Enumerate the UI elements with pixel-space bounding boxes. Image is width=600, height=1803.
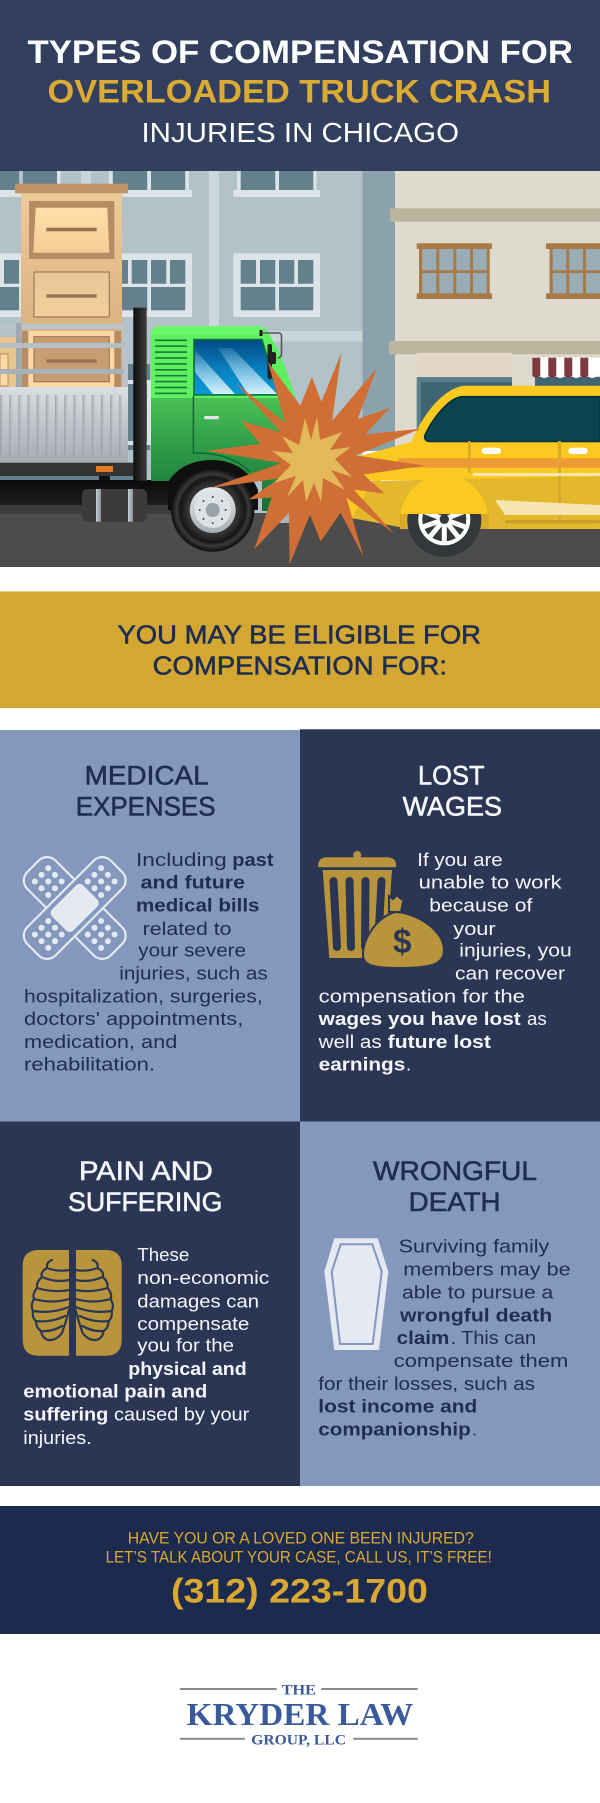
body text: medical expenses: medication, and — [24, 1031, 177, 1052]
panel: pain and suffering — [0, 1122, 300, 1486]
body text: lost wages: because of — [429, 895, 533, 916]
front truck wheel — [168, 460, 258, 552]
left grey building — [0, 171, 362, 516]
orange body stripe — [398, 458, 600, 468]
third row window behind truck — [128, 364, 150, 450]
small box at left — [0, 337, 16, 388]
body text: medical expenses: hospitalization, surgeries, — [24, 986, 263, 1007]
heading: wrongful death: WRONGFUL — [373, 1156, 537, 1186]
body text: lost wages: well as — [318, 1031, 382, 1052]
body text: medical expenses: medical bills — [136, 895, 260, 916]
body text: wrongful death: lost income and — [318, 1396, 477, 1417]
body text: pain and suffering: you for the — [137, 1335, 234, 1356]
body text: pain and suffering: emotional pain and — [23, 1381, 207, 1402]
logo: The Kryder Law Group, LLC: KRYDER LAW — [187, 1696, 413, 1732]
explosion burst — [207, 353, 425, 564]
brown window A — [417, 243, 492, 299]
icon: crossed bandages — [19, 852, 131, 964]
body text: pain and suffering: These — [137, 1244, 189, 1265]
body text: wrongful death: Surviving family — [399, 1236, 550, 1257]
road — [0, 513, 600, 567]
drawer 2 — [34, 272, 109, 317]
shop sign and storefront — [416, 352, 512, 430]
heading: medical expenses: EXPENSES — [76, 792, 216, 822]
banner: eligibility heading — [0, 591, 600, 708]
top row windows — [0, 190, 192, 197]
orange marker light — [96, 466, 113, 472]
body text: pain and suffering: damages can — [137, 1290, 259, 1311]
car wheel — [400, 475, 489, 557]
body text: lost wages — [318, 849, 572, 1075]
body text: medical expenses — [24, 849, 274, 1075]
body text: medical expenses: past — [232, 849, 274, 870]
body text: wrongful death: claim — [397, 1327, 449, 1348]
heading: lost wages: WAGES — [403, 792, 502, 822]
body text: wrongful death: . This can — [451, 1327, 536, 1348]
body text: medical expenses: related to — [143, 918, 232, 939]
yellow car — [340, 386, 600, 557]
body text: wrongful death: members may be — [403, 1259, 571, 1280]
body text: pain and suffering — [23, 1244, 269, 1448]
banner: eligibility heading: YOU MAY BE ELIGIBLE FOR — [118, 622, 481, 650]
call to action text: HAVE YOU OR A LOVED ONE BEEN INJURED? — [128, 1529, 474, 1547]
logo: The Kryder Law Group, LLC — [180, 1682, 418, 1748]
right beige building — [389, 171, 600, 451]
body text: medical expenses: Including — [136, 849, 227, 870]
logo: The Kryder Law Group, LLC: THE — [282, 1682, 316, 1698]
phone number: (312) 223-1700 — [171, 1573, 428, 1611]
drawer 3 — [22, 331, 121, 388]
second row left window — [0, 253, 192, 317]
header panel — [0, 0, 600, 171]
body text: lost wages: as — [527, 1008, 547, 1029]
body text: medical expenses: injuries, such as — [119, 962, 268, 983]
body text: pain and suffering: injuries. — [23, 1427, 92, 1448]
body text: lost wages: earnings — [319, 1054, 405, 1075]
title line 3: INJURIES IN CHICAGO — [142, 117, 459, 148]
panel: lost wages — [300, 729, 600, 1122]
body text: lost wages: injuries, you — [459, 940, 572, 961]
heading: lost wages — [403, 761, 502, 822]
body text: wrongful death: able to pursue a — [402, 1282, 554, 1303]
body text: pain and suffering: compensate — [137, 1313, 249, 1334]
icon: rib cage — [23, 1250, 122, 1356]
corrugated truck bed — [0, 387, 128, 463]
body text: lost wages: If you are — [417, 849, 503, 870]
door handles — [482, 448, 501, 454]
chassis — [0, 480, 182, 505]
brown window B — [546, 243, 600, 299]
drawer 1 — [29, 201, 114, 259]
dollar sign: $ — [393, 923, 412, 961]
door seams — [468, 441, 471, 473]
side mirror — [260, 330, 282, 379]
green cab — [151, 326, 300, 523]
illustration: truck crashing into car on a city street — [0, 171, 600, 567]
shadow column — [362, 171, 395, 451]
logo: The Kryder Law Group, LLC: GROUP, LLC — [251, 1732, 346, 1748]
heading: pain and suffering: SUFFERING — [68, 1187, 222, 1217]
light strip — [473, 473, 600, 476]
body text: wrongful death: compensate them — [394, 1350, 568, 1371]
body text: lost wages: future lost — [388, 1031, 491, 1052]
panel: wrongful death — [300, 1122, 600, 1486]
body text: lost wages: compensation for the — [319, 986, 525, 1007]
heading: lost wages: LOST — [418, 761, 484, 791]
body text: lost wages: wages you have lost — [318, 1008, 521, 1029]
stacked cabinet cargo — [0, 184, 128, 388]
exhaust stack — [133, 308, 147, 481]
lower reflection — [495, 500, 600, 515]
body text: wrongful death: . — [472, 1419, 477, 1440]
body text: wrongful death: for their losses, such as — [318, 1373, 535, 1394]
door handle — [204, 416, 219, 419]
body text: wrongful death: wrongful death — [399, 1305, 552, 1326]
heading: wrongful death: DEATH — [409, 1187, 501, 1217]
body text: medical expenses: doctors' appointments, — [24, 1008, 243, 1029]
striped awning — [532, 358, 600, 386]
panel: medical expenses — [0, 730, 300, 1122]
body text: pain and suffering: suffering — [23, 1404, 108, 1425]
body text: lost wages: can recover — [455, 962, 565, 983]
body text: medical expenses: rehabilitation. — [24, 1054, 155, 1075]
heading: wrongful death — [373, 1156, 537, 1217]
body text: lost wages: your — [453, 918, 496, 939]
body text: wrongful death: companionship — [318, 1419, 471, 1440]
truck — [0, 308, 300, 552]
body text: pain and suffering: physical and — [128, 1358, 247, 1379]
heading: medical expenses: MEDICAL — [85, 761, 209, 791]
fuel tank — [82, 489, 147, 522]
heading: medical expenses — [76, 761, 216, 822]
call to action panel: LET’S TALK ABOUT YOUR CASE, CALL US, IT’S FREE! — [106, 1548, 492, 1566]
title line 1: TYPES OF COMPENSATION FOR — [28, 34, 573, 70]
body text: lost wages: . — [406, 1054, 411, 1075]
call to action panel — [0, 1506, 600, 1634]
bed rails — [0, 323, 125, 388]
body text: lost wages: unable to work — [419, 872, 563, 893]
second row right window — [233, 253, 320, 317]
heading: pain and suffering: PAIN AND — [79, 1156, 213, 1186]
door outline — [193, 396, 250, 472]
icon: trash can with money bag — [318, 851, 444, 968]
body text: medical expenses: and future — [141, 872, 245, 893]
body text: medical expenses: your severe — [138, 940, 246, 961]
car window — [425, 397, 600, 442]
body text: pain and suffering: caused by your — [114, 1404, 249, 1425]
body text: wrongful death — [318, 1236, 571, 1440]
body text: pain and suffering: non-economic — [137, 1267, 269, 1288]
grille lines — [155, 340, 187, 394]
heading: pain and suffering — [68, 1156, 222, 1217]
icon: coffin — [324, 1238, 388, 1350]
title line 2: OVERLOADED TRUCK CRASH — [48, 74, 551, 110]
banner: eligibility heading: COMPENSATION FOR: — [153, 653, 447, 681]
windshield — [194, 340, 278, 395]
